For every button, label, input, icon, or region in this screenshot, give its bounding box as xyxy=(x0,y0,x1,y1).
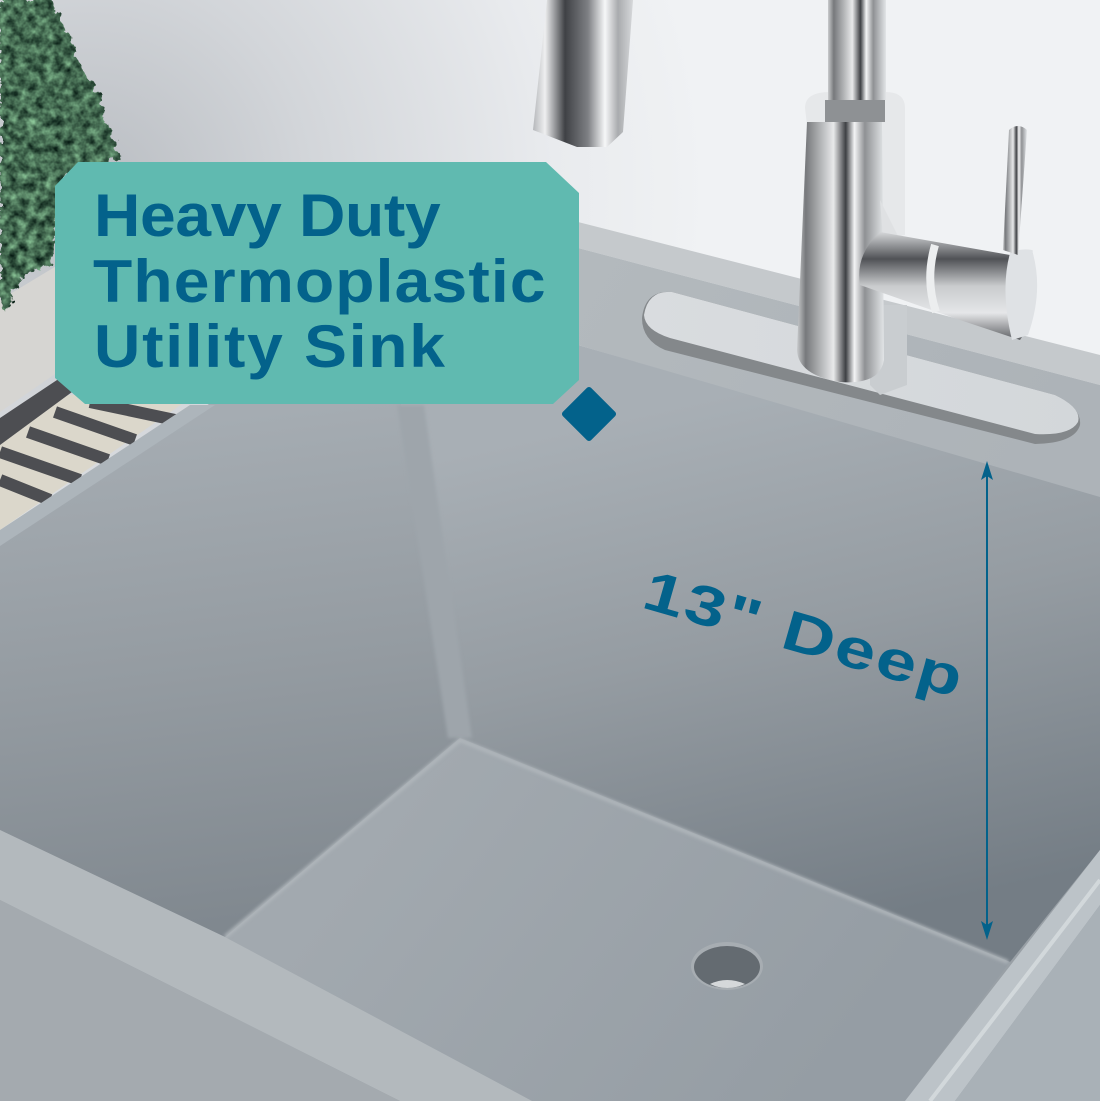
plant pot xyxy=(0,265,58,412)
faucet body xyxy=(797,0,905,382)
sink base fill xyxy=(0,400,1100,1101)
diamond marker xyxy=(561,386,617,442)
faucet deck plate xyxy=(642,292,1080,444)
callout text: Utility Sink xyxy=(94,314,445,381)
back corner fold xyxy=(397,405,472,738)
depth label: 13" Deep xyxy=(637,558,970,709)
backsplash lip xyxy=(578,222,1100,385)
front rim xyxy=(0,830,532,1101)
spout head xyxy=(533,0,633,147)
faucet lower neck xyxy=(870,305,907,395)
sink left wall xyxy=(0,400,460,937)
sink back wall xyxy=(400,345,1100,962)
callout badge xyxy=(55,162,579,404)
photo background: wall xyxy=(0,0,1100,560)
drain xyxy=(691,942,763,990)
sink floor xyxy=(225,738,1010,1101)
callout text xyxy=(93,183,546,381)
callout text: Thermoplastic xyxy=(93,249,546,316)
depth arrow xyxy=(981,461,993,940)
plant xyxy=(0,0,120,312)
left rim xyxy=(0,405,215,546)
callout text: Heavy Duty xyxy=(94,183,441,250)
sink deck xyxy=(578,248,1100,500)
right rim xyxy=(905,850,1100,1101)
faucet handle xyxy=(859,126,1037,340)
drying rack xyxy=(0,378,195,530)
